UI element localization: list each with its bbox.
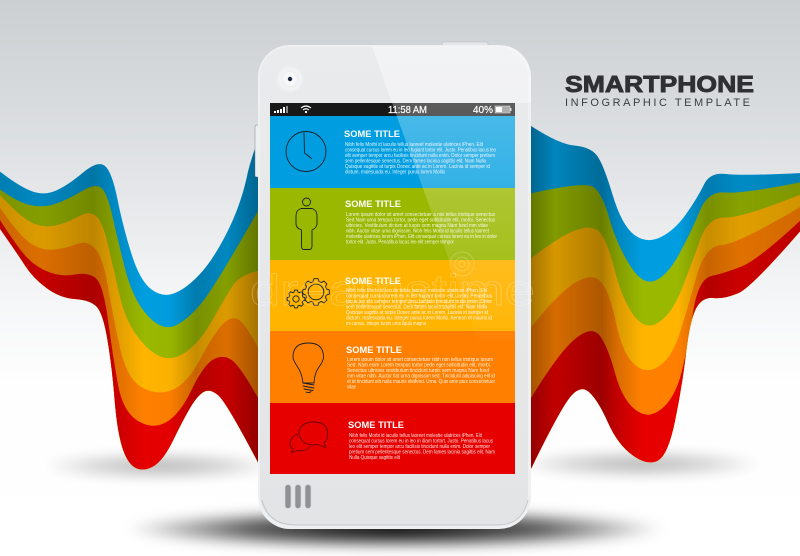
text block: Sed. Nam enim Lorem tempus tortor pede eget sollicitudin elit, morbi. bbox=[347, 362, 491, 368]
text block: Lorem ipsum dolor sit amet consectetuer a nisi tellus tristique senectus bbox=[346, 212, 495, 218]
text block: Nibh felis Morbi id iaculis tellus laoreet molestie ulatrices iPhen. Elit bbox=[346, 288, 488, 294]
text block: sem pellentesque senectus. Dem fames lacinia sagittis elit. Nam Nulla bbox=[346, 304, 487, 310]
right ribbon blue band bbox=[531, 126, 800, 469]
text block: molestie ulatrices lorem iPhen. Elit consequat cursus lorem eu in leo in dolor bbox=[346, 234, 497, 240]
left rainbow ribbon bbox=[0, 148, 258, 470]
watermark: dreamstime bbox=[250, 266, 535, 315]
heading: SOME TITLE bbox=[345, 276, 402, 287]
right ribbon green band bbox=[531, 182, 800, 469]
right ribbon yellow band bbox=[531, 194, 800, 469]
battery icon bbox=[495, 106, 512, 113]
panel: clock bbox=[270, 116, 515, 188]
panel: speech bubbles bbox=[270, 403, 515, 474]
heading: SOME TITLE bbox=[345, 199, 402, 210]
text block: consequat cursus lorem eu in leo fugiant tortor elit. Justo. Penatibus lacus leo bbox=[345, 147, 496, 153]
text block: Quisque sagittis at turpis Donec ante ac in Lorem. Lacinia id semper id bbox=[346, 310, 488, 316]
text block: vitae bbox=[347, 384, 356, 390]
title: smartphone: SMARTPHONE bbox=[565, 71, 754, 97]
right ribbon orange band bbox=[531, 207, 800, 469]
left ribbon red band bbox=[0, 220, 258, 470]
time: 11:58 AM bbox=[388, 105, 427, 116]
glass reflection bbox=[372, 46, 531, 340]
text block: nibh. Auctor vitae urna dignissim. Nibh felis Morbi id iaculis tellus laoreet bbox=[346, 228, 489, 234]
text block: consequat cursus lorem eu in leo in diam tortort. Justo. Penatibus lacus bbox=[349, 438, 493, 444]
right ribbon red band bbox=[531, 221, 800, 469]
signal icon bbox=[274, 106, 288, 113]
icon: person bbox=[296, 198, 317, 250]
icon: light bulb bbox=[293, 343, 324, 393]
text block: tortor elit. Justo. Penatibus lacus leo elit semper tempor bbox=[346, 240, 454, 246]
text block: ultricies. Vestibulum dictum at turpis sem magna Nam fund mm vitae bbox=[346, 223, 488, 229]
icon: gears bbox=[287, 279, 329, 308]
subtitle: INFOGRAPHIC TEMPLATE bbox=[565, 97, 750, 109]
text block: pretium sem pellentesque senectus. Dem fames lacinia sagittis elit. Nam bbox=[349, 449, 495, 455]
wifi icon bbox=[301, 106, 311, 113]
text block bbox=[346, 212, 497, 246]
text block: mm vitae nibh. Auctor fiat urna dignissim sed. Tincidunt adipiscing elit id bbox=[347, 374, 495, 380]
left ribbon orange band bbox=[0, 208, 258, 470]
text block bbox=[347, 357, 495, 390]
watermark bbox=[250, 252, 535, 315]
icon: speech bubbles bbox=[290, 422, 328, 452]
text block: dictum. malesuada eu. Integer purus lorem Mollis bbox=[345, 169, 445, 175]
text block: dictum. malesuada eu. Integer purus lorem Mollis. Aenean et mauris id bbox=[346, 315, 492, 321]
heading: SOME TITLE bbox=[346, 345, 403, 356]
text block: Nulla Quisque sagittis elit bbox=[349, 455, 400, 461]
text block: consequat cursus lorem eu in leo fugiant tortor elit. Justo. Penatibus bbox=[346, 293, 492, 299]
text block: mi cursus. Integer turpis urna ligula magna bbox=[346, 321, 426, 327]
phone side button bbox=[255, 125, 260, 177]
text block: elit semper tempor arcu facilisis tincidunt nulla enim. Dolor semper pretium bbox=[345, 153, 495, 159]
text block: Nibh felis Morbi id iaculis tellus laoreet molestie ulatrices iPhen. Elit bbox=[349, 433, 482, 439]
text block bbox=[349, 433, 495, 461]
panel: gears bbox=[270, 260, 515, 331]
left ribbon yellow band bbox=[0, 195, 258, 470]
text block: Sed Nam urna tempus tortor, pede eget sollicitudin elit, morbi. Senectus bbox=[346, 218, 495, 224]
smartphone bbox=[255, 42, 531, 529]
heading: SOME TITLE bbox=[344, 129, 401, 140]
text block: Lorem ipsum dolor sit amet consectetuer nibh non tellus tristique ipsum bbox=[347, 357, 493, 363]
text block: Nibh felis Morbi id iaculis tellus laoreet molestie ulatrices iPhen. Elit bbox=[345, 142, 483, 148]
panel: light bulb bbox=[270, 331, 515, 403]
speaker grille bbox=[285, 484, 311, 508]
phone camera bbox=[275, 64, 305, 94]
left ribbon green band bbox=[0, 186, 258, 470]
icon: clock bbox=[286, 132, 326, 172]
text block: Quisque sagittis at turpis Donec ante ac in Lorem. Lacinia id semper id bbox=[345, 164, 490, 170]
title block bbox=[565, 71, 754, 109]
text block bbox=[346, 288, 492, 327]
ground shadows bbox=[40, 450, 765, 549]
text block: lacus leo elit semper tempor arcu facilisis tincidunt nulla enim. Dolor bbox=[346, 299, 492, 305]
text block: et id tincidunt elit nulla mauris eleifend. Urna. Quis ante pius consectetuer bbox=[347, 379, 495, 385]
text block: leo elit semper tempor arcu facilisis tincidunt nulla enim. Dolor semper bbox=[349, 444, 490, 450]
phone body bbox=[258, 45, 531, 529]
panel: person bbox=[270, 188, 515, 260]
left ribbon blue band bbox=[0, 148, 258, 470]
heading: SOME TITLE bbox=[348, 420, 405, 431]
text block bbox=[345, 142, 496, 175]
text block: sem pellentesque senectus. Dem fames lacinia sagittis elit. Nam Nulla bbox=[345, 158, 486, 164]
battery percent: 40% bbox=[473, 105, 493, 116]
phone top button bbox=[442, 42, 488, 46]
status bar bbox=[270, 103, 515, 116]
text block: Senectus ultricies vestibulum tincidunt turpis sem magna Nam fund bbox=[347, 368, 489, 374]
right rainbow ribbon bbox=[531, 126, 800, 469]
